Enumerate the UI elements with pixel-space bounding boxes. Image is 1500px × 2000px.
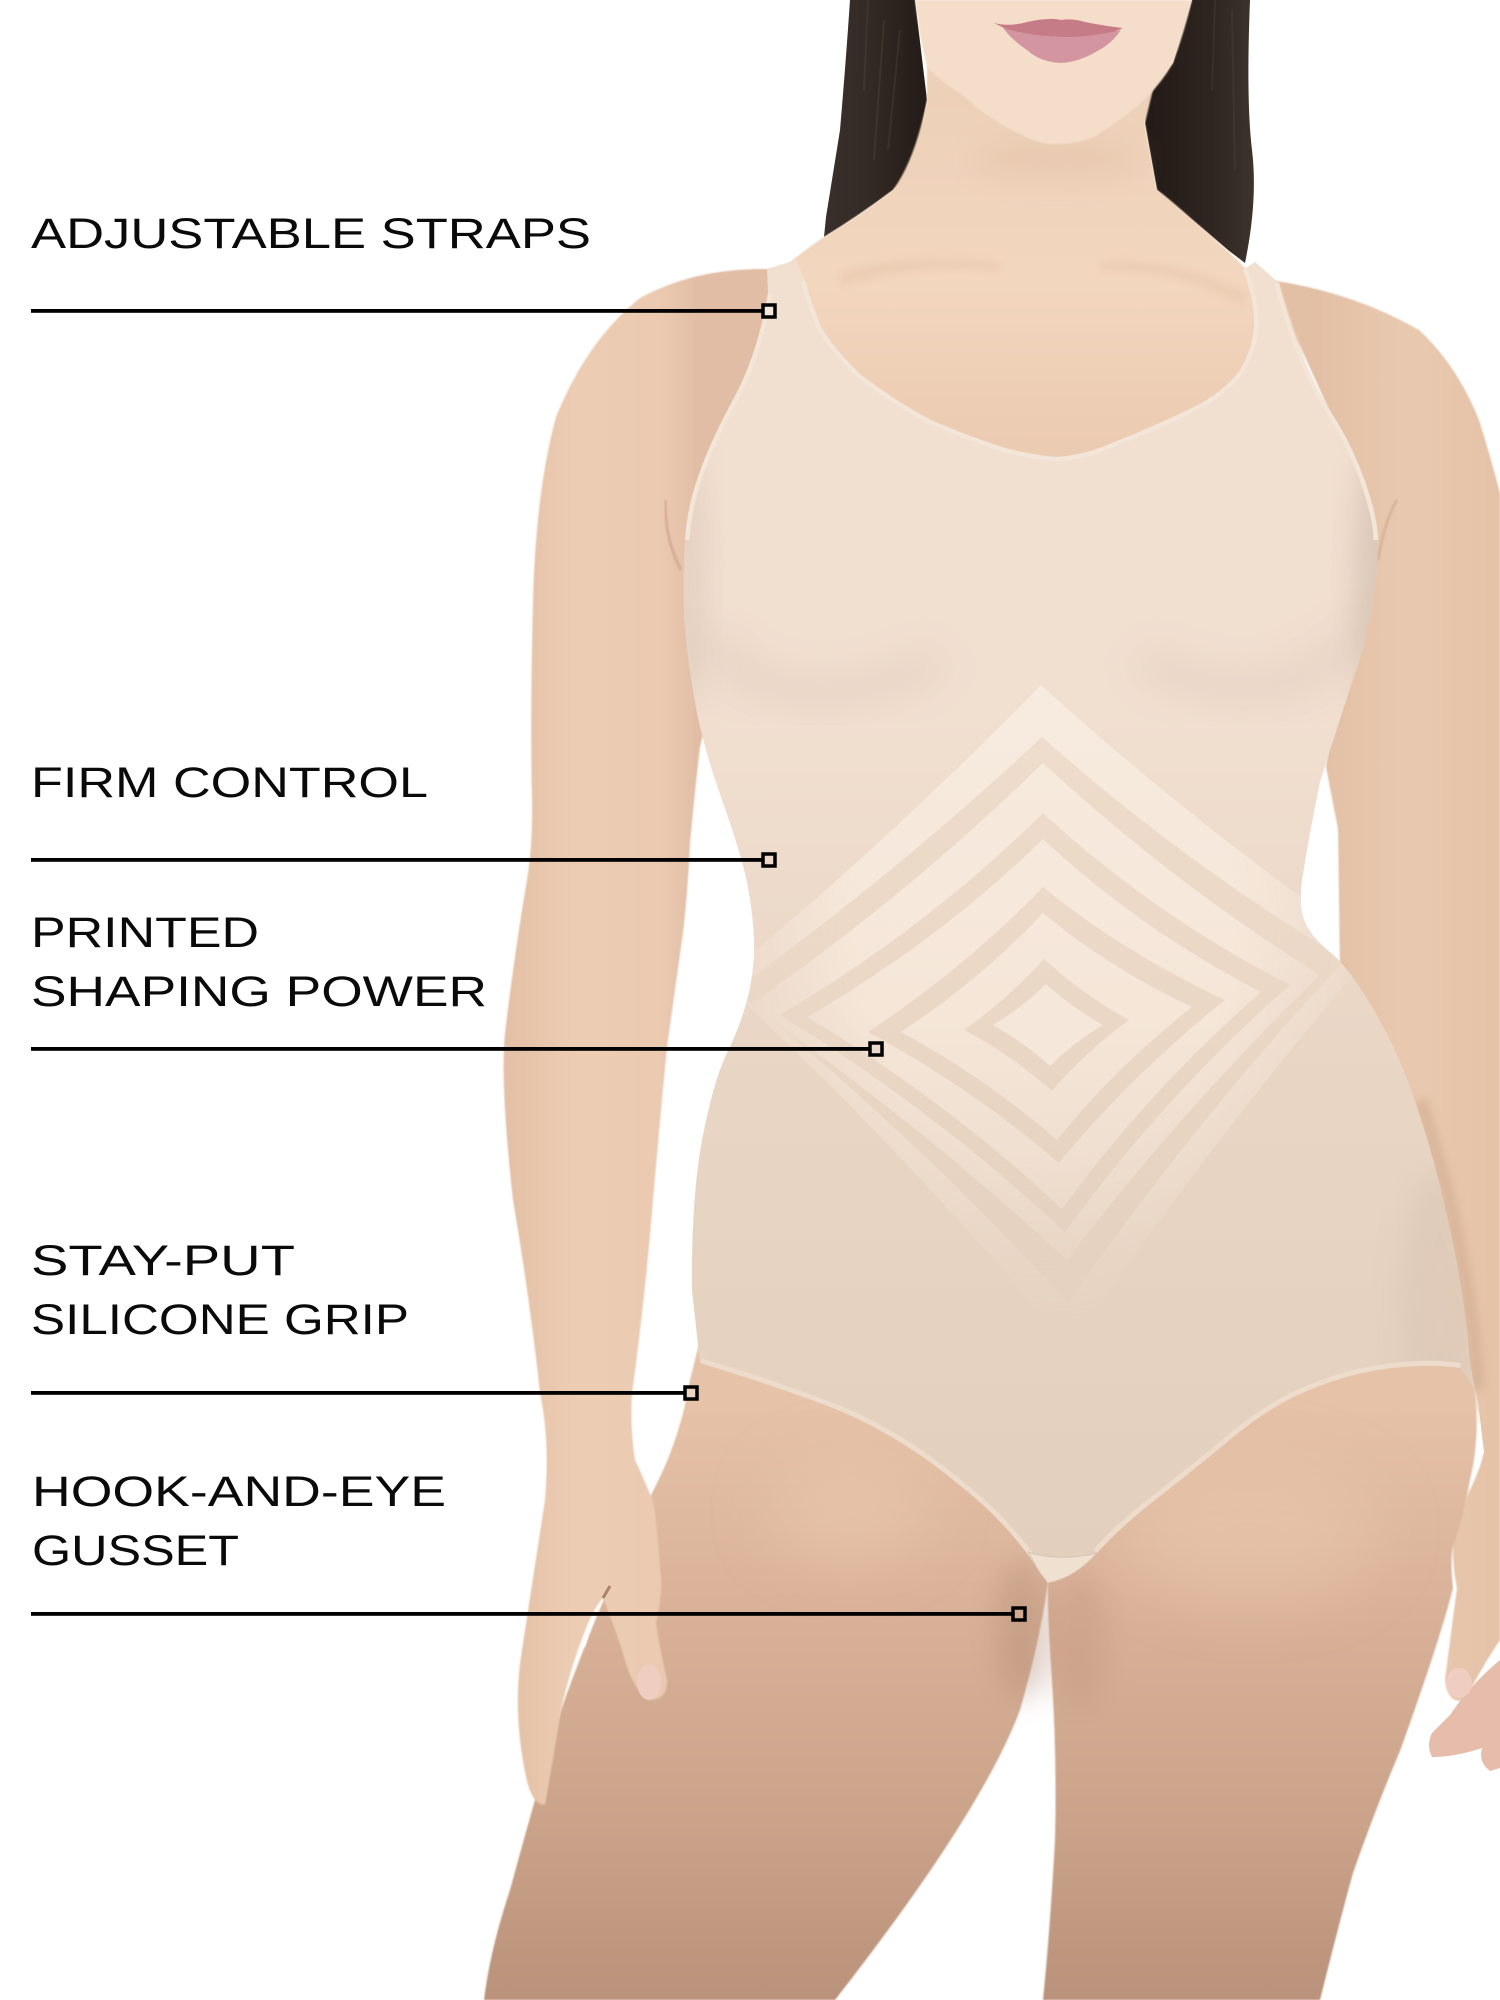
neckline and strap trim [685, 270, 1378, 540]
marker [763, 305, 775, 317]
thigh shading [770, 1460, 1380, 1710]
marker [1013, 1608, 1025, 1620]
callout: firm control [31, 759, 775, 866]
diamond shaping panel [780, 685, 1310, 1202]
label line one: PRINTED [31, 909, 259, 957]
lips [994, 19, 1123, 63]
marker [870, 1043, 882, 1055]
hair, right side [1145, 0, 1254, 263]
under-chin shading [970, 138, 1140, 182]
callout: printed shaping power [31, 909, 882, 1055]
gusset [1028, 1552, 1097, 1583]
bodysuit [660, 250, 1500, 1600]
leader line [31, 1612, 1013, 1616]
label line one: HOOK-AND-EYE [32, 1468, 446, 1516]
label text: FIRM CONTROL [31, 759, 428, 807]
hair, left side [824, 0, 927, 237]
marker [763, 854, 775, 866]
bodysuit base [660, 250, 1500, 1600]
left thumb nail [637, 1664, 661, 1700]
bust and side shading [684, 476, 1457, 1358]
right arm shading along the hip [1420, 1100, 1478, 1390]
right leg [1043, 1340, 1477, 2000]
label line two: SHAPING POWER [31, 968, 487, 1016]
leader line [31, 858, 763, 862]
white gap by right hip [1477, 1394, 1484, 1470]
right thumb nail [1446, 1668, 1472, 1698]
leader line [31, 1047, 870, 1051]
right arm and hand [1270, 280, 1500, 1701]
neck and chest [760, 60, 1340, 470]
marker [685, 1387, 697, 1399]
left arm and hand [504, 269, 796, 1805]
leader line [31, 309, 763, 313]
callout: stay-put silicone grip [31, 1237, 697, 1399]
face, chin and jaw [915, 0, 1192, 144]
left leg [484, 1340, 1048, 2000]
armpit creases [665, 500, 1397, 570]
label line two: GUSSET [32, 1527, 239, 1575]
left hand crease and finger gap [583, 1586, 610, 1648]
right hand fingers [1429, 1660, 1500, 1771]
model figure [484, 0, 1500, 2000]
callout: adjustable straps [31, 210, 775, 317]
callout: hook-and-eye gusset [31, 1468, 1025, 1620]
label line one: STAY-PUT [31, 1237, 295, 1285]
collarbone shading [840, 258, 1245, 308]
leader line [31, 1391, 685, 1395]
label text: ADJUSTABLE STRAPS [31, 210, 591, 258]
hem trim [700, 1363, 1460, 1573]
label line two: SILICONE GRIP [31, 1296, 409, 1344]
